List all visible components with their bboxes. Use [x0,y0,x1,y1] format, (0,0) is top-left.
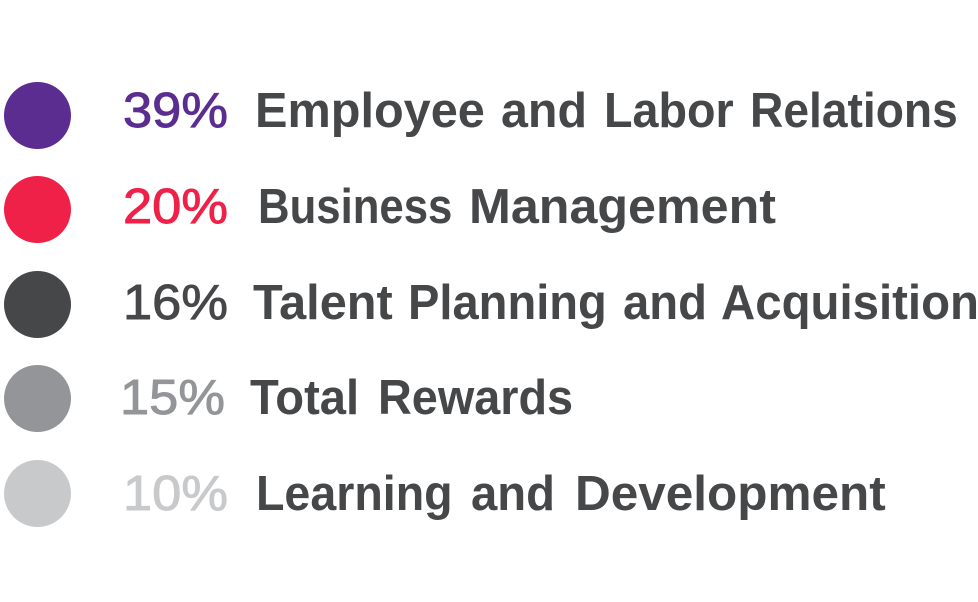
label: Talent Planning and Acquisition: Acquisition [721,276,978,330]
legend row: Business Management [4,176,776,243]
label: Learning and Development: and [471,467,555,521]
label: Talent Planning and Acquisition: Planning [408,276,606,330]
icon: purple dot [4,82,71,149]
label: Talent Planning and Acquisition: Talent [253,276,393,330]
percentage: 16%: 16% [123,276,228,330]
legend row: Talent Planning and Acquisition [4,271,978,338]
label: Total Rewards [250,371,573,425]
legend row: Learning and Development [4,460,886,527]
label: Employee and Labor Relations [255,84,957,138]
label: Employee and Labor Relations: Employee [255,84,485,138]
legend row: Employee and Labor Relations [4,82,957,149]
label: Employee and Labor Relations: Relations [750,84,957,138]
label: Total Rewards: Rewards [378,371,573,425]
label: Employee and Labor Relations: and [501,84,587,138]
label: Total Rewards: Total [250,371,359,425]
icon: red dot [4,176,71,243]
label: Business Management [258,180,776,234]
icon: light gray dot [4,460,71,527]
percentage: 39%: 39% [123,84,228,138]
label: Business Management: Management [468,180,776,234]
label: Learning and Development: Learning [256,467,453,521]
label: Talent Planning and Acquisition: and [623,276,707,330]
percentage: 10%: 10% [123,467,228,521]
percentage: 15%: 15% [120,371,225,425]
legend row: Total Rewards [4,365,573,432]
icon: dark gray dot [4,271,71,338]
label: Talent Planning and Acquisition [253,276,978,330]
label: Learning and Development: Development [575,467,885,521]
icon: medium gray dot [4,365,71,432]
label: Business Management: Business [258,180,452,234]
label: Employee and Labor Relations: Labor [604,84,733,138]
percentage: 20%: 20% [123,180,228,234]
label: Learning and Development [256,467,886,521]
